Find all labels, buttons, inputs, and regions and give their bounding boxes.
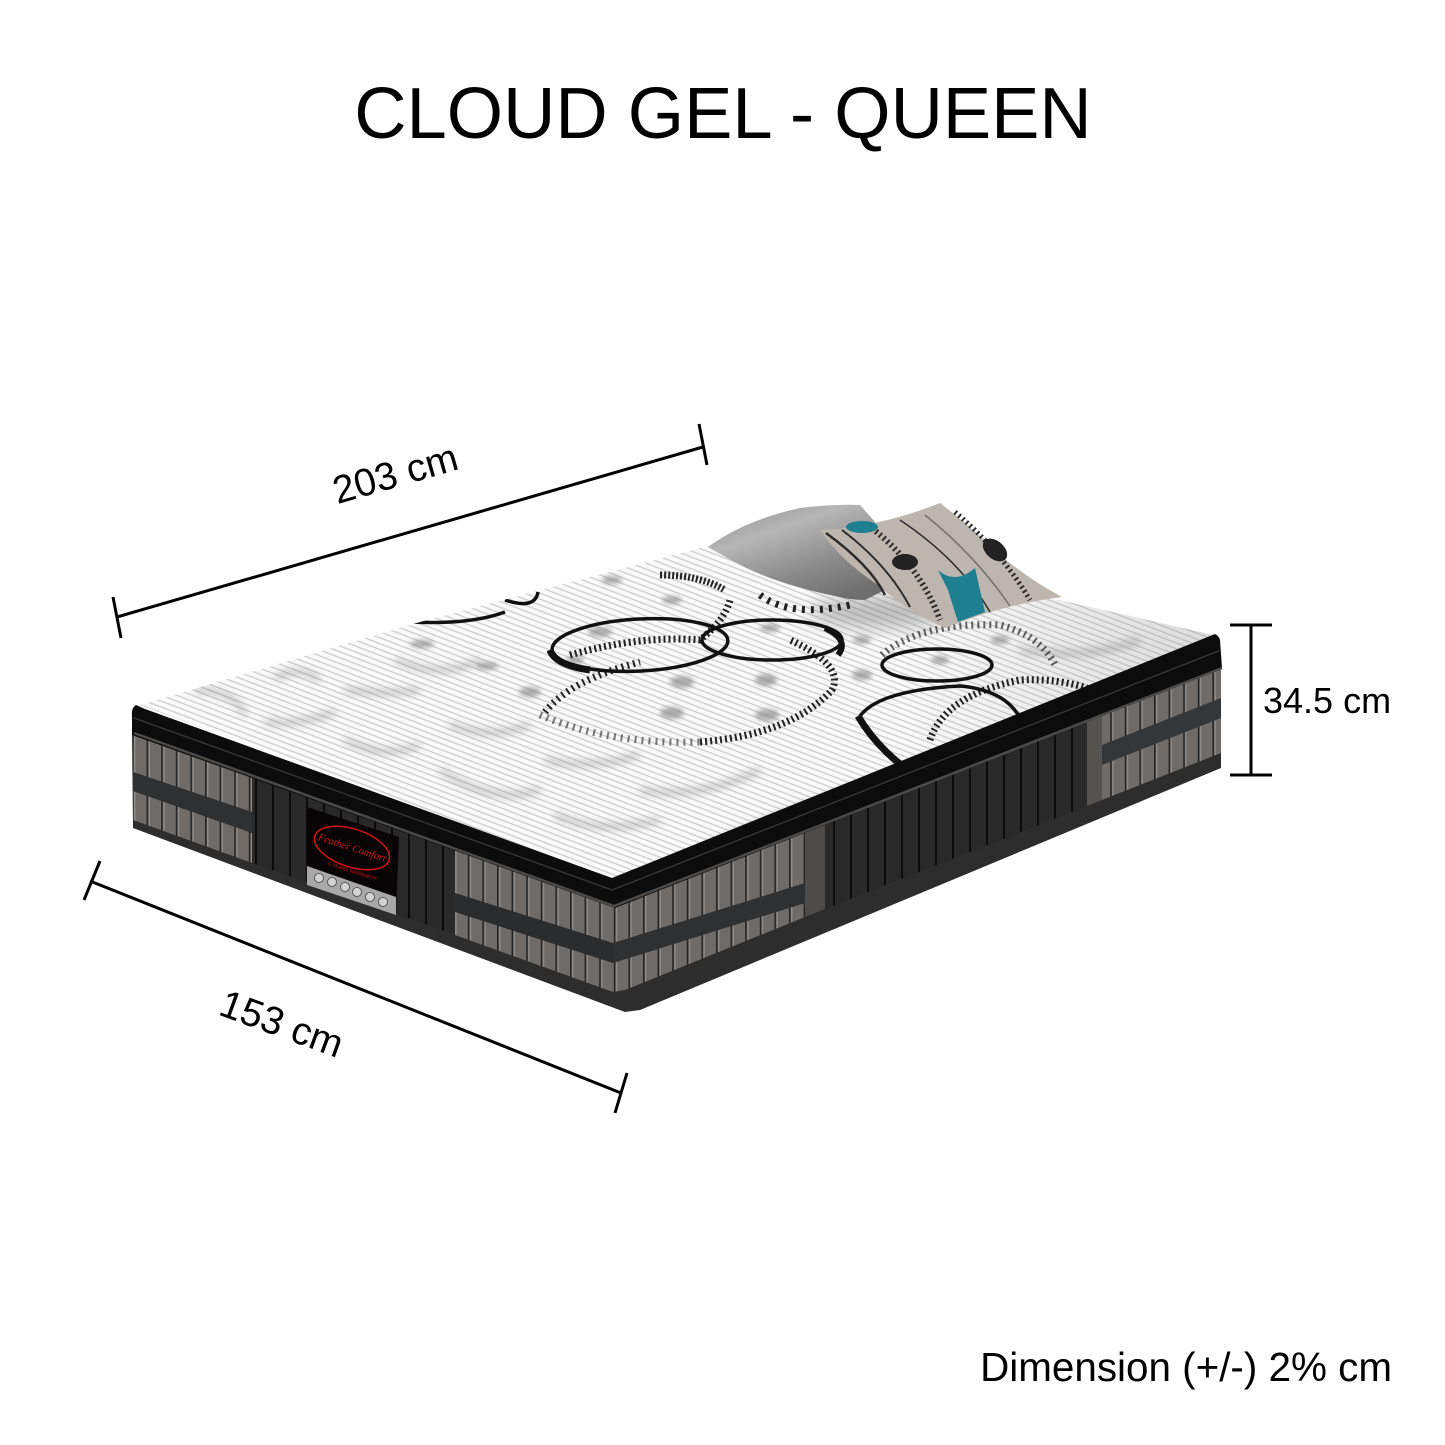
label background xyxy=(307,807,399,915)
handle rear xyxy=(1087,715,1102,806)
left side grey panel xyxy=(133,735,252,863)
tuft buttons xyxy=(410,576,1009,721)
brand oval xyxy=(309,818,395,878)
pillow-top creases xyxy=(195,640,1140,850)
zipper piping xyxy=(132,634,1222,908)
right black panel xyxy=(825,721,1087,909)
handle front xyxy=(805,824,825,917)
width label: 153 cm xyxy=(214,982,349,1066)
warranty text: 5 YEARS WARRANTY xyxy=(327,861,378,883)
quilted top surface xyxy=(140,546,1213,876)
far end shading xyxy=(993,599,1213,724)
title: CLOUD GEL - QUEEN xyxy=(354,73,1092,154)
label strip xyxy=(307,866,396,915)
mattress xyxy=(130,530,1230,1012)
brand label xyxy=(307,807,399,915)
left black panel xyxy=(252,778,455,935)
front left grey panel xyxy=(455,850,613,992)
dimension: length 203 cm xyxy=(113,424,707,638)
length label: 203 cm xyxy=(328,436,463,513)
feature icons xyxy=(314,874,388,906)
tolerance note: Dimension (+/-) 2% cm xyxy=(980,1344,1392,1390)
pillow shadow xyxy=(810,596,950,628)
length line xyxy=(113,424,707,638)
width line xyxy=(84,861,627,1113)
height line xyxy=(1230,625,1272,775)
mattress side base piping xyxy=(132,668,1221,1012)
dimension: width 153 cm xyxy=(84,861,627,1113)
black ring lines xyxy=(410,592,1020,768)
height label: 34.5 cm xyxy=(1263,680,1391,721)
front right grey panel xyxy=(613,832,805,992)
far right grey panel xyxy=(1102,668,1221,800)
grey pillow xyxy=(708,505,895,600)
dashed ring patterns xyxy=(540,575,1092,742)
brand name: Feather Comfort xyxy=(315,832,388,865)
patterned pillow xyxy=(820,503,1062,628)
